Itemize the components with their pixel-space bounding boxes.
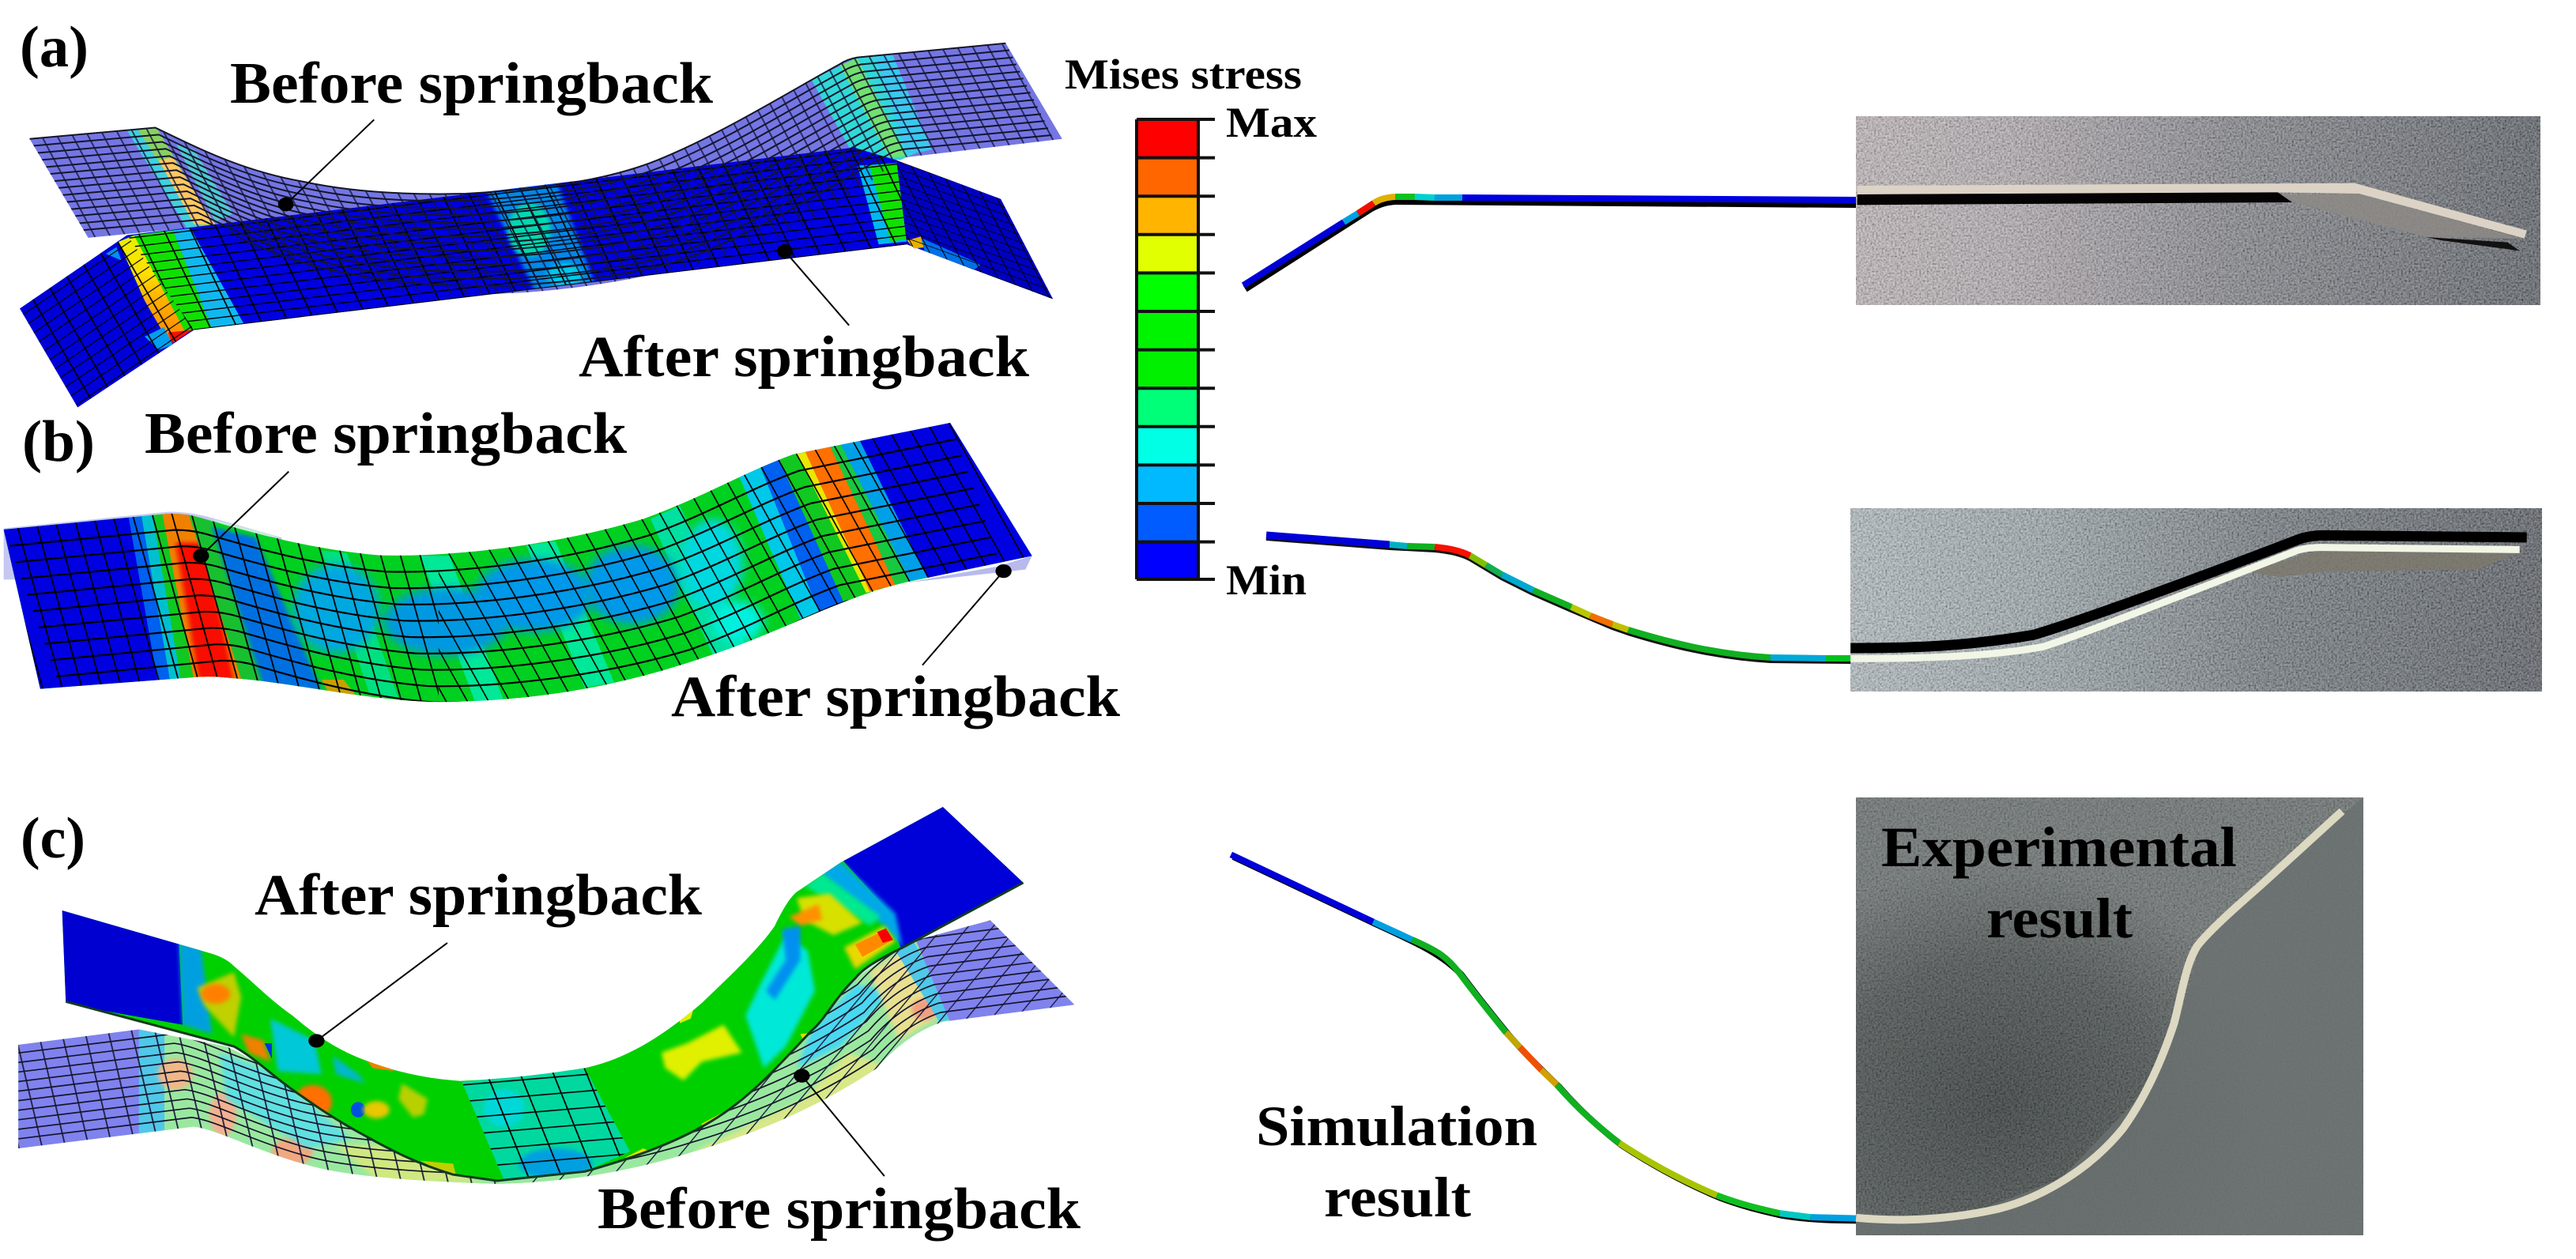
label: result: result — [1986, 887, 2133, 950]
panel a: before and after springback sheet — [0, 27, 1107, 407]
leader: after springback — [922, 564, 1012, 665]
sheet after springback with stress contours — [43, 802, 1045, 1185]
photo: experimental result c — [1856, 797, 2363, 1235]
white sheet curve — [1850, 548, 2520, 658]
sheet before springback — [4, 512, 1032, 582]
leader: before springback — [278, 119, 374, 211]
mesh of sheet before springback — [29, 43, 1054, 294]
leader: after springback — [777, 244, 849, 326]
sheet edge — [1858, 183, 2527, 239]
dark shadow line — [1858, 192, 2292, 205]
specimen — [1856, 811, 2342, 1219]
label: Experimental: Experimental — [1881, 816, 2237, 879]
right stress band before springback — [812, 55, 932, 160]
label: after springback a: After springback — [579, 325, 1030, 390]
panel label a: (a) — [20, 15, 89, 80]
shadow under sheet — [2249, 551, 2518, 577]
simulation cross-section c — [1231, 854, 1860, 1220]
leader: before springback — [193, 472, 289, 563]
legend title: Mises stress — [1065, 51, 1302, 98]
legend max label: Max — [1226, 99, 1317, 146]
left stress band before springback — [127, 128, 233, 228]
sheet after springback: central section — [127, 148, 907, 330]
mesh of sheet b — [0, 419, 1053, 706]
label: after springback c: After springback — [255, 863, 703, 928]
stress bands after springback — [106, 163, 981, 350]
sheet shadow — [2278, 194, 2522, 239]
leader: after springback — [308, 943, 447, 1048]
lower edge of sheet after springback — [66, 883, 1024, 1181]
sheet before springback — [30, 43, 1062, 294]
label: before springback b: Before springback — [145, 401, 628, 466]
photo: experimental result a — [1856, 116, 2540, 305]
sheet after springback: right flange — [896, 160, 1053, 300]
colour cells — [1137, 119, 1198, 579]
photo: experimental result b — [1850, 508, 2542, 692]
lighter cloth right of sheet — [1856, 797, 2363, 1235]
legend min label: Min — [1226, 556, 1307, 604]
sheet before springback with pale stress colours — [0, 914, 1096, 1192]
mesh of sheet before springback — [0, 912, 1096, 1192]
sheet after springback with stress bands — [0, 419, 1045, 706]
mesh of sheet after springback — [20, 148, 1053, 407]
label: before springback a: Before springback — [230, 51, 714, 116]
sheet after springback: left flange — [20, 235, 194, 407]
simulation cross-section a — [1243, 197, 1858, 288]
legend: Mises stress colour bar — [1137, 119, 1215, 579]
label: after springback b: After springback — [671, 665, 1121, 729]
label: Simulation: Simulation — [1256, 1095, 1537, 1158]
simulation cross-section b — [1266, 535, 1854, 661]
label: before springback c: Before springback — [598, 1177, 1081, 1242]
bar outline and ticks — [1137, 119, 1215, 579]
black shadow curve — [1850, 535, 2527, 648]
leader: before springback — [794, 1069, 884, 1176]
label: result: result — [1324, 1166, 1471, 1229]
panel c: before and after springback sheet — [0, 802, 1096, 1192]
panel label b: (b) — [22, 409, 95, 474]
panel label c: (c) — [21, 806, 85, 871]
panel b: before and after springback sheet — [0, 419, 1053, 706]
